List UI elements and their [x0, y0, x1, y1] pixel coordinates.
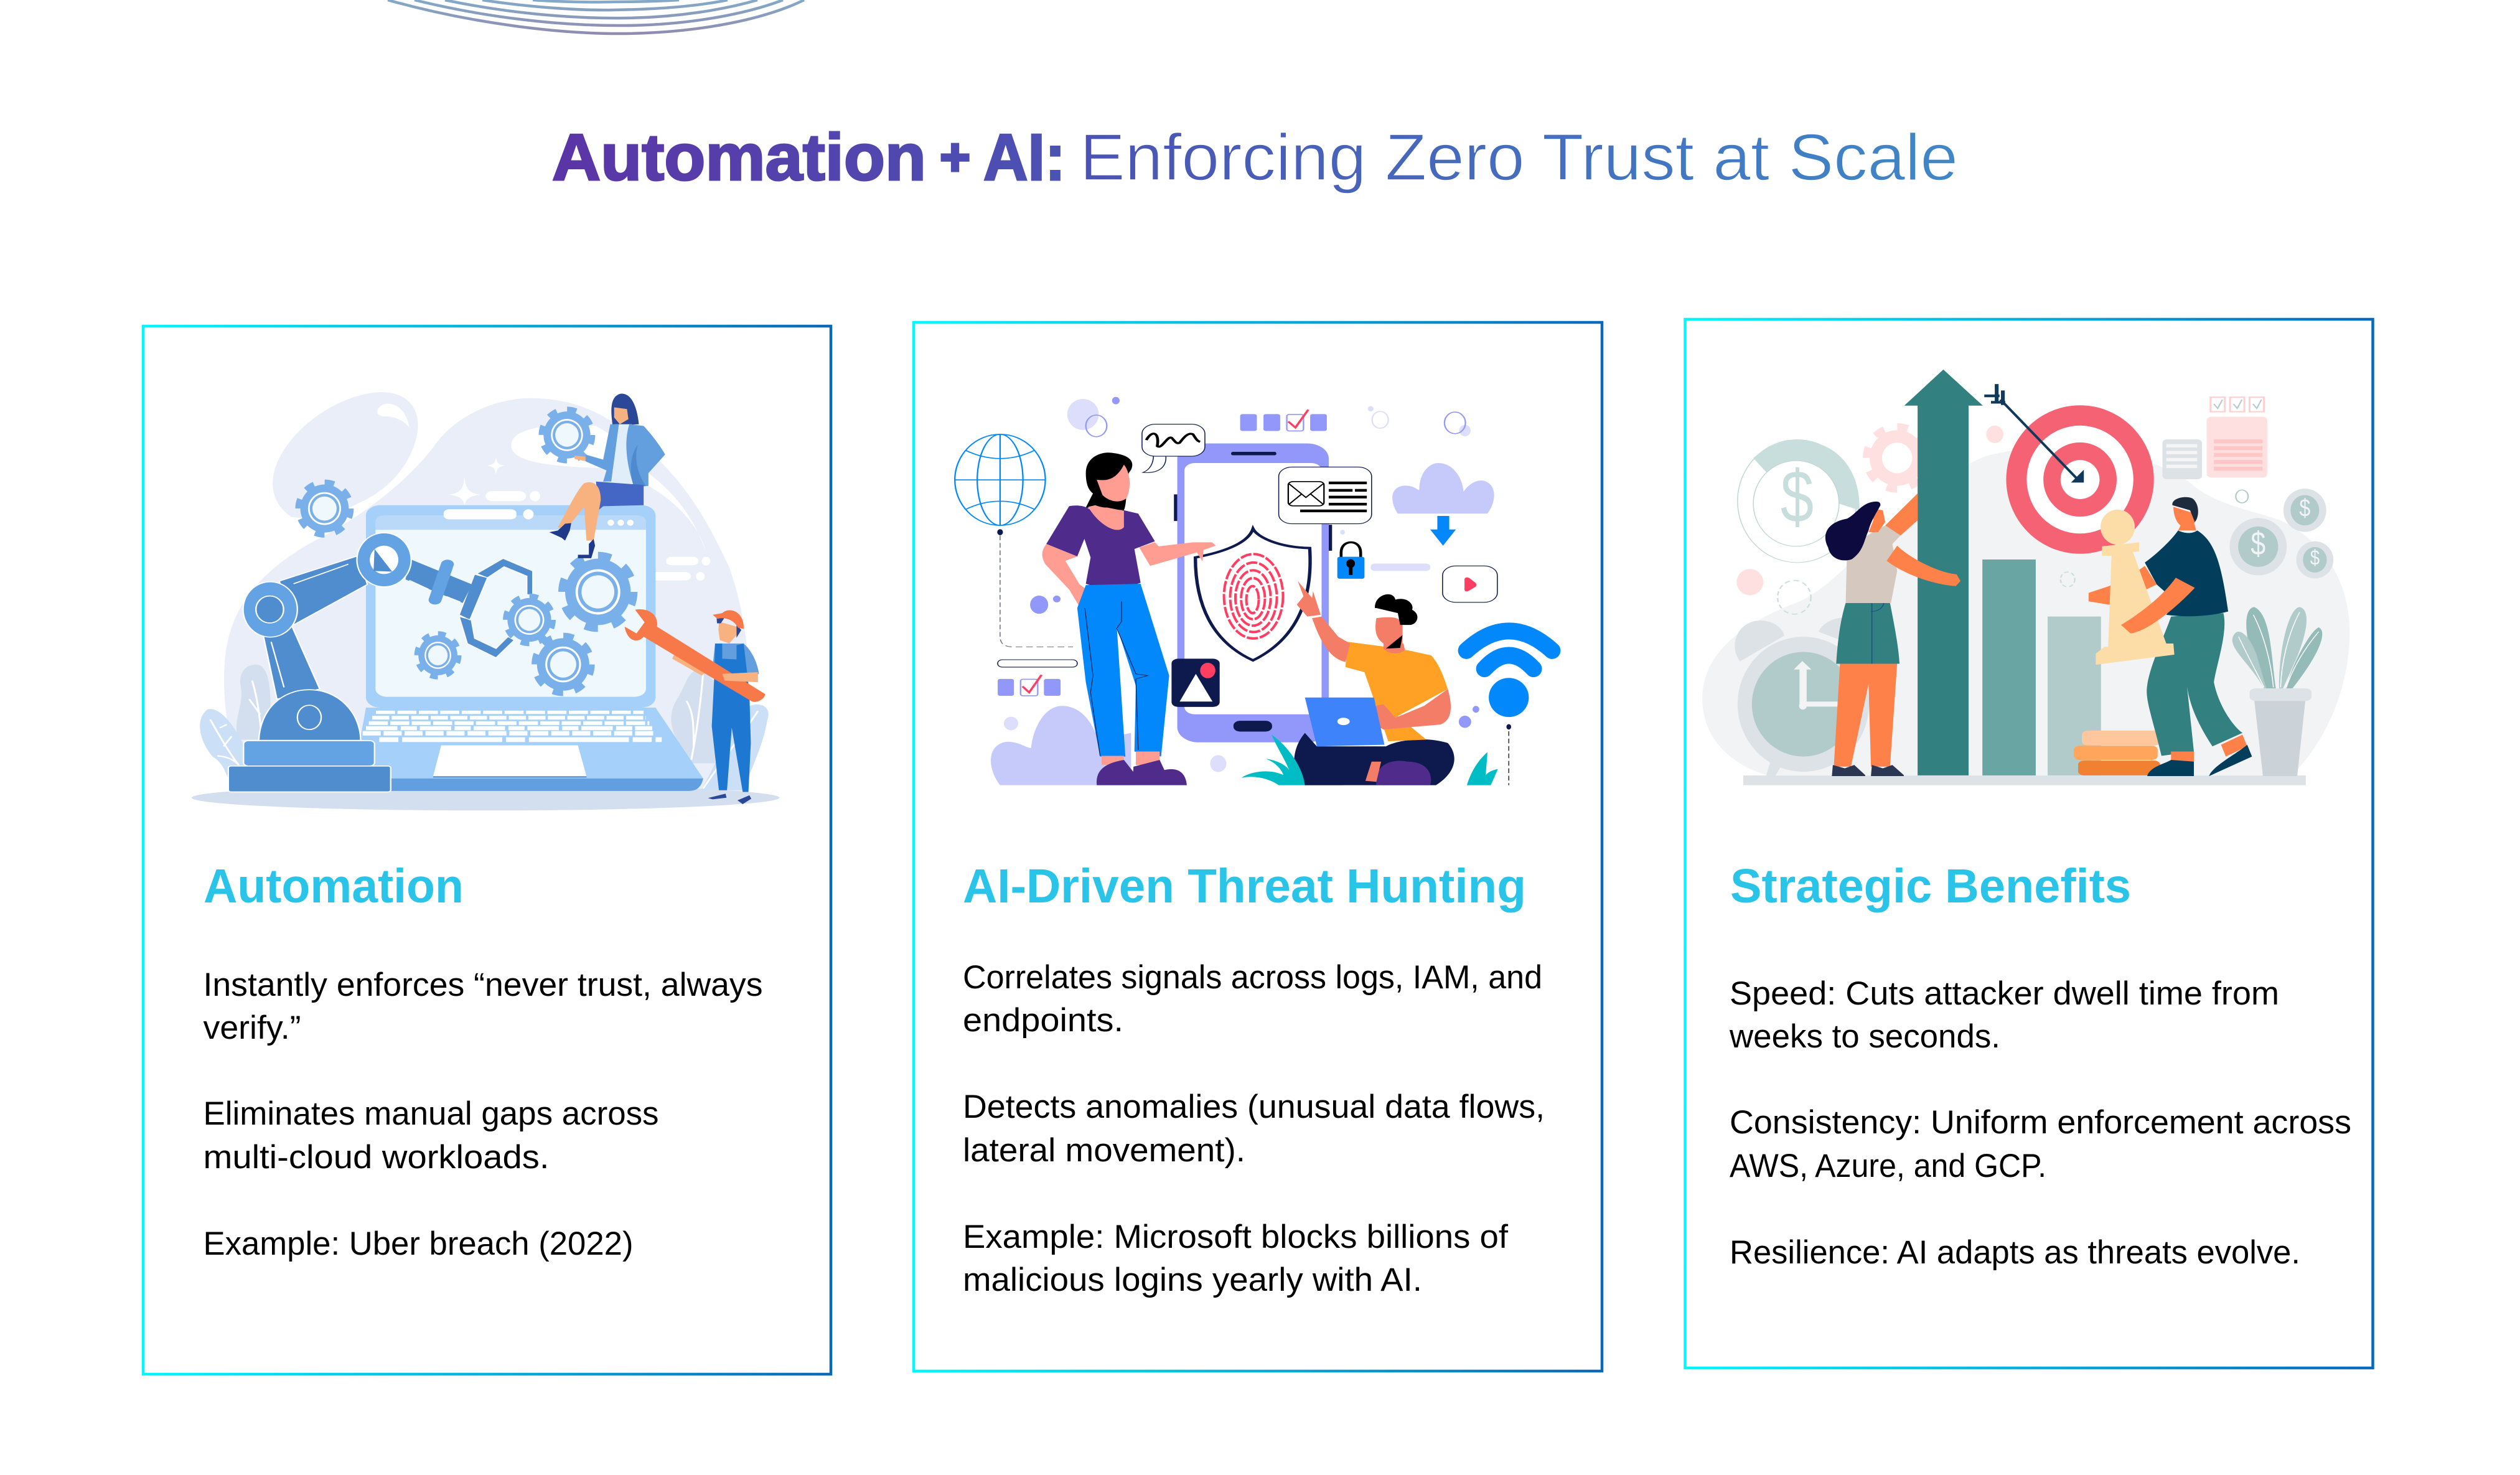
figure: woman pushing arrow: [1825, 494, 1960, 776]
icon: wifi: [1466, 631, 1552, 785]
bar chart with growth arrow: [1904, 370, 2101, 775]
icon: padlock: [1337, 542, 1364, 579]
icon: clock: [1735, 618, 1869, 775]
icon: plant in pot: [2232, 607, 2322, 776]
icon: checkbox row top: [1240, 410, 1327, 431]
title: AI:: [983, 121, 1066, 194]
phone: [1174, 444, 1332, 742]
text block: [963, 959, 1545, 1298]
text block: Example: Uber breach (2022): [203, 1225, 634, 1262]
figure: man holding pawn: [2089, 497, 2252, 776]
text block: malicious logins yearly with AI.: [963, 1262, 1422, 1298]
icon: cloud with download arrow: [1392, 463, 1494, 546]
icon: dollar coins: [2229, 489, 2333, 578]
icon: dollar ring: [1738, 440, 1860, 563]
icon: pink gear: [1868, 428, 1927, 488]
text block: [1729, 975, 2351, 1271]
title: Automation: [552, 121, 926, 194]
text block: Eliminates manual gaps across: [203, 1095, 658, 1132]
text block: Resilience: AI adapts as threats evolve.: [1730, 1234, 2300, 1271]
decorative arcs at top edge: [388, 0, 804, 34]
icon: video play: [1443, 566, 1497, 602]
icon: speech bubble: [1142, 424, 1205, 472]
text block: AWS, Azure, and GCP.: [1730, 1148, 2046, 1184]
text block: Speed: Cuts attacker dwell time from: [1730, 975, 2279, 1012]
icon: image card: [1171, 658, 1220, 707]
icon: shield with fingerprint: [1196, 529, 1310, 660]
icon: dollar coins: $: [2299, 494, 2310, 522]
figure: seated man with laptop: [1294, 581, 1454, 785]
icon: globe: [955, 434, 1046, 525]
panel: AI-driven threat hunting: [914, 322, 1602, 1371]
title: +: [940, 128, 970, 186]
title: Enforcing Zero Trust at Scale: [1080, 121, 1958, 194]
text block: multi-cloud workloads.: [203, 1139, 549, 1176]
text block: lateral movement).: [963, 1132, 1245, 1169]
text block: Detects anomalies (unusual data flows,: [963, 1089, 1545, 1125]
grass: [1242, 734, 1498, 785]
heading: Automation: [204, 859, 464, 913]
text block: Instantly enforces “never trust, always: [203, 967, 763, 1003]
text block: endpoints.: [963, 1002, 1123, 1039]
text block: Consistency: Uniform enforcement across: [1730, 1104, 2351, 1141]
figure: standing woman: [1042, 452, 1216, 785]
text block: [203, 967, 763, 1262]
heading: AI-Driven Threat Hunting: [963, 859, 1526, 913]
text block: Example: Microsoft blocks billions of: [963, 1219, 1508, 1255]
icon: documents: [2162, 397, 2267, 479]
icon: dollar coins: $: [2251, 525, 2265, 563]
icon: email card: [1279, 467, 1372, 524]
icon: checkbox row lower: [998, 675, 1061, 696]
illustration: growth chart, target and two people: [1702, 370, 2349, 785]
illustration: phone with fingerprint shield and two people: [955, 397, 1552, 785]
text block: verify.”: [203, 1009, 301, 1046]
icon: dollar coins: $: [2310, 546, 2320, 569]
illustration: robot arm and laptop with gears: [192, 392, 779, 810]
figure: woman sitting on laptop: [542, 394, 665, 558]
text block: Correlates signals across logs, IAM, and: [963, 959, 1542, 996]
panel: strategic benefits: [1685, 319, 2372, 1368]
icon: target with arrow: [1984, 384, 2154, 554]
heading: Strategic Benefits: [1730, 859, 2131, 913]
icon: stacked books: [2074, 731, 2160, 775]
text block: weeks to seconds.: [1729, 1018, 2000, 1055]
cloud lower left: [991, 706, 1131, 785]
icon: dollar ring: $: [1781, 455, 1814, 538]
figure: worker with wrench: [625, 609, 765, 804]
panel: automation: [143, 326, 831, 1374]
